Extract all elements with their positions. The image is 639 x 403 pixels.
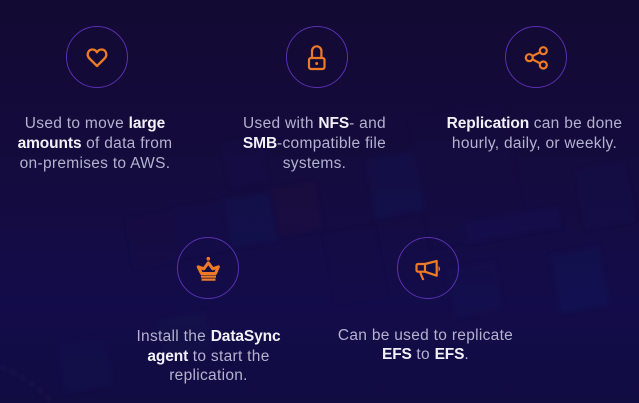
icon: megaphone <box>397 237 459 299</box>
text: large amounts <box>18 114 172 172</box>
text: large amounts: Used to move large <box>25 114 165 132</box>
text: large amounts: amounts of data from <box>18 134 172 152</box>
text: DataSync agent <box>136 328 281 384</box>
text: NFS and SMB: systems. <box>283 154 346 172</box>
text: replication schedule: hourly, daily, or weekly. <box>452 134 617 152</box>
icon: lock <box>286 26 348 88</box>
icon: crown <box>177 237 239 299</box>
icon: heart <box>66 26 128 88</box>
text: DataSync agent: Install the DataSync <box>136 328 281 345</box>
text: DataSync agent: agent to start the <box>147 348 270 365</box>
text: DataSync agent: replication. <box>169 367 248 384</box>
text: large amounts: on-premises to AWS. <box>20 154 170 172</box>
text: EFS to EFS: EFS to EFS. <box>382 346 469 362</box>
text: NFS and SMB: SMB-compatible file <box>243 134 386 152</box>
text: replication schedule: Replication can be done <box>447 114 622 132</box>
text: replication schedule <box>447 114 622 152</box>
text: NFS and SMB <box>243 114 386 172</box>
text: NFS and SMB: Used with NFS- and <box>243 114 386 132</box>
icon: share <box>505 26 567 88</box>
text: EFS to EFS <box>338 327 513 362</box>
text: EFS to EFS: Can be used to replicate <box>338 327 513 344</box>
